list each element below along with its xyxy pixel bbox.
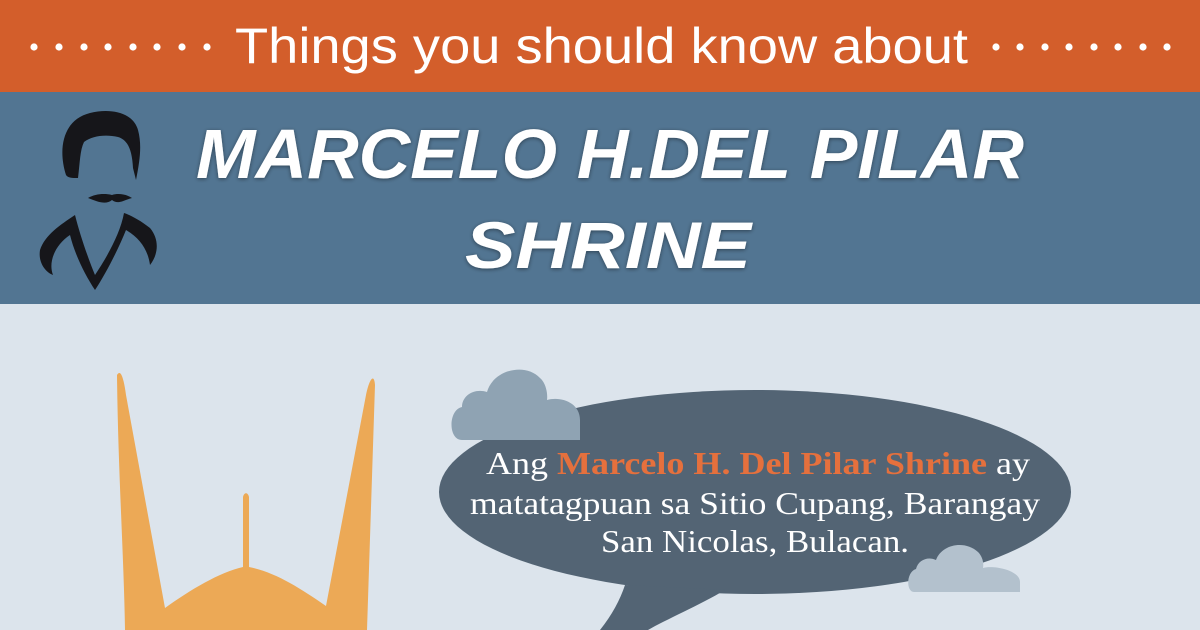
bubble text xyxy=(470,445,1040,559)
header band xyxy=(0,0,1200,92)
main title xyxy=(196,115,1024,282)
cloud bottom-right xyxy=(908,545,1020,592)
bubble text: matatagpuan sa Sitio Cupang, Barangay xyxy=(470,485,1040,521)
title band xyxy=(0,92,1200,304)
dots right xyxy=(992,43,1171,51)
bubble text: San Nicolas, Bulacan. xyxy=(601,523,909,559)
speech bubble xyxy=(439,370,1071,630)
dots left xyxy=(30,43,211,51)
cloud top-left xyxy=(452,370,580,440)
subtitle: Things you should know about xyxy=(235,18,968,74)
main title: MARCELO H.DEL PILAR xyxy=(196,115,1024,193)
main title: SHRINE xyxy=(465,208,753,282)
bubble text: Ang Marcelo H. Del Pilar Shrine ay xyxy=(486,445,1030,481)
icon: portrait silhouette xyxy=(40,111,157,290)
icon: shrine building xyxy=(117,373,375,630)
